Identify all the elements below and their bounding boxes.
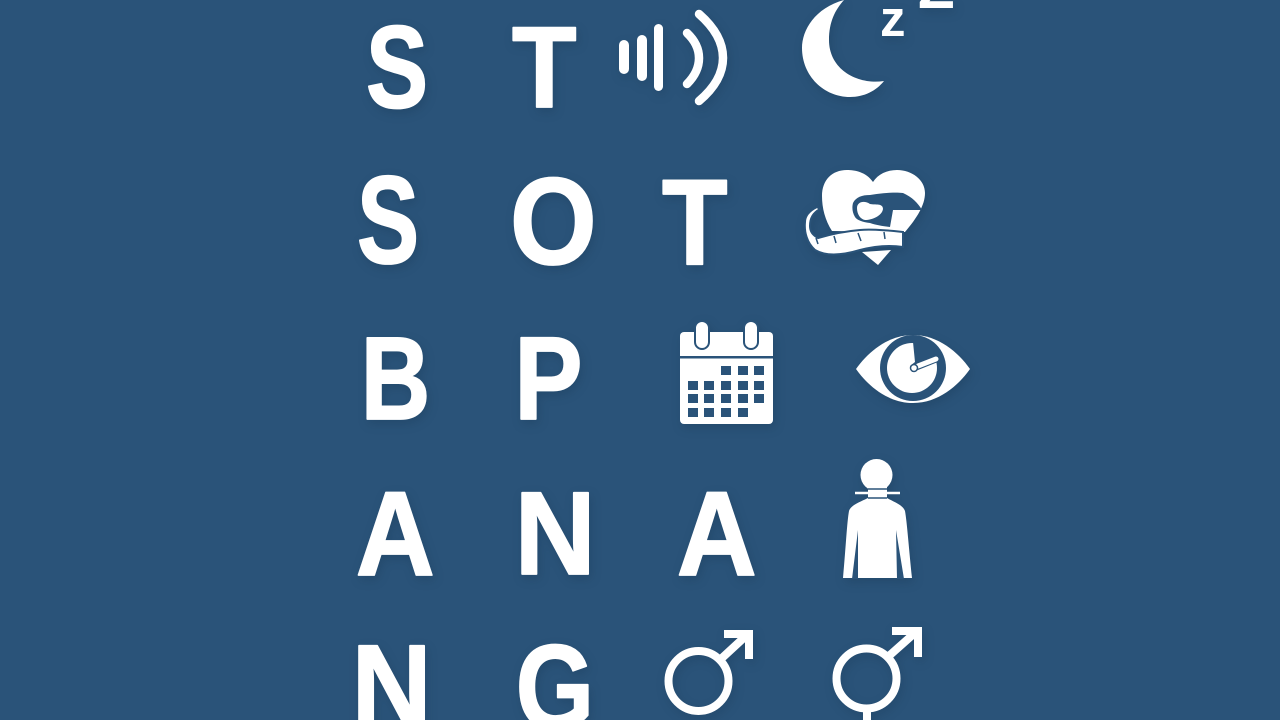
icon: heart with measuring tape <box>805 170 925 265</box>
row 2: letters S O T: S <box>357 151 419 290</box>
row 1: letters S T <box>366 2 577 133</box>
icon: crescent moon with z letters <box>802 0 955 97</box>
icon: sound waves <box>619 14 723 101</box>
icon: person with neck measurement <box>843 459 912 579</box>
icon: calendar <box>680 321 773 424</box>
row 4: letters A N A: A <box>677 468 757 601</box>
row 2: letters S O T: T <box>662 155 728 291</box>
row 5: letters N G <box>352 621 594 720</box>
row 3: letters B P: B <box>361 313 430 444</box>
row 2: letters S O T: O <box>510 153 597 290</box>
row 3: letters B P <box>361 313 583 445</box>
row 2: letters S O T <box>357 151 728 291</box>
row 4: letters A N A: N <box>515 468 596 600</box>
icon: transgender symbol <box>836 631 918 720</box>
row 3: letters B P: P <box>514 313 583 445</box>
icon: eye with clock iris <box>856 335 970 403</box>
row 4: letters A N A: A <box>356 468 435 601</box>
row 4: letters A N A <box>356 468 757 601</box>
icon: male symbol <box>668 634 749 711</box>
row 1: letters S T: S <box>366 2 428 133</box>
row 1: letters S T: T <box>512 4 577 132</box>
